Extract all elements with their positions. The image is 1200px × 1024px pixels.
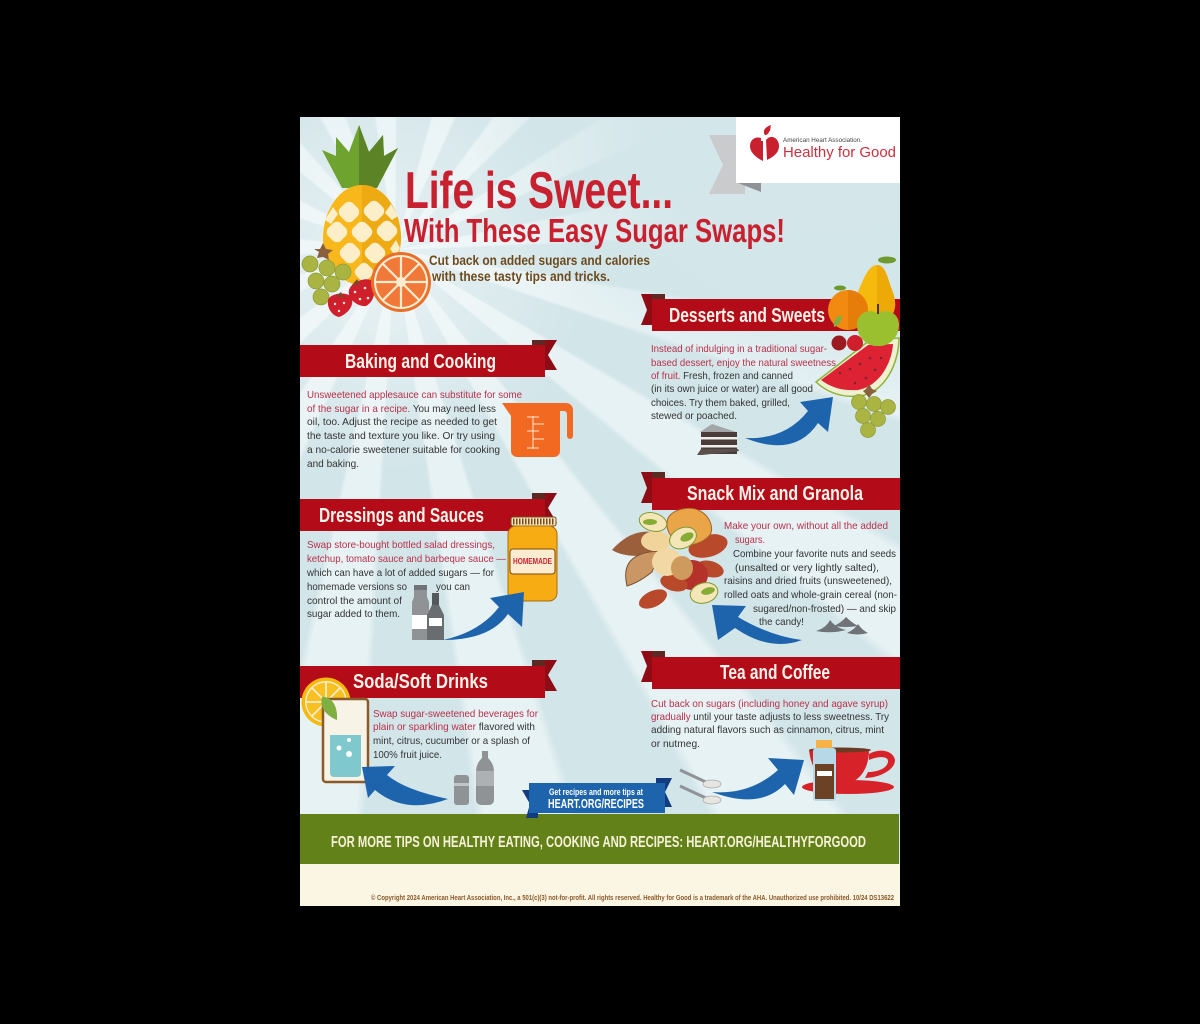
text: tea: Cut back on sugars (including honey and agave syrup) (651, 698, 888, 710)
icon: cake (697, 424, 739, 455)
text: snack: raisins and dried fruits (unsweetened), (724, 575, 892, 587)
green tips band (300, 814, 899, 864)
ribbon: tea: Tea and Coffee (720, 662, 830, 684)
text: baking: and baking. (307, 458, 359, 470)
ribbon: soda (300, 660, 557, 698)
text: tea: or nutmeg. (651, 738, 700, 750)
icon: spice bottle (813, 740, 836, 801)
title: With These Easy Sugar Swaps! (404, 212, 785, 249)
ribbon: dressings: Dressings and Sauces (319, 505, 484, 527)
text: baking: oil, too. Adjust the recipe as needed to get (307, 416, 497, 428)
icon: lemon slice (302, 678, 350, 726)
panel: tea and coffee (641, 651, 900, 804)
text: dressings: sugar added to them. (307, 608, 400, 620)
arrow: candy to nuts (712, 605, 802, 644)
ribbon: desserts: Desserts and Sweets (669, 305, 825, 327)
icon: spoons (680, 770, 721, 804)
subtitle: with these tasty tips and tricks. (431, 268, 610, 284)
text: snack: Combine your favorite nuts and seeds (733, 548, 896, 560)
arrow: bottles to jar (443, 592, 524, 640)
ribbon: baking (300, 340, 557, 377)
text: tea (651, 698, 890, 750)
copyright: © Copyright 2024 American Heart Association, Inc., a 501(c)(3) not-for-profit. All rights reserved. Healthy for Good is a trademark of the AHA. Unauthorized use prohibited. 10/24 DS13622 (371, 894, 894, 902)
text: desserts (651, 343, 836, 422)
text: snack: rolled oats and whole-grain cereal (non- (724, 589, 897, 601)
banner: recipes link: Get recipes and more tips at (549, 787, 644, 798)
ribbon: snack: Snack Mix and Granola (687, 483, 864, 505)
title (404, 162, 785, 249)
icon: chocolate chips (816, 617, 868, 634)
text: desserts: (in its own juice or water) are all good (651, 383, 813, 395)
panel: snack mix and granola (612, 472, 900, 644)
text: tea: adding natural flavors such as cinnamon, citrus, mint (651, 724, 884, 736)
logo panel: Healthy for Good (783, 144, 896, 161)
icon: orange slice (371, 252, 431, 312)
text: baking: of the sugar in a recipe. You may need less (307, 403, 496, 415)
subtitle (429, 252, 650, 284)
text: dressings: Swap store-bought bottled salad dressings, (307, 539, 495, 551)
text: desserts: choices. Try them baked, grilled, (651, 397, 790, 409)
icon: store bottles (412, 585, 444, 640)
text: desserts: Instead of indulging in a traditional sugar- (651, 343, 827, 355)
subtitle: Cut back on added sugars and calories (429, 252, 650, 268)
ribbon: soda: Soda/Soft Drinks (353, 671, 488, 693)
icon: glass of water (321, 697, 368, 782)
text: tea: gradually until your taste adjusts to less sweetness. Try (651, 711, 890, 723)
banner: recipes link: HEART.ORG/RECIPES (548, 797, 644, 811)
ribbon: snack (641, 472, 900, 510)
ribbon: baking: Baking and Cooking (345, 351, 496, 373)
icon: nuts (612, 508, 730, 613)
banner: recipes link (522, 778, 672, 818)
text: soda: plain or sparkling water flavored with (373, 721, 535, 733)
icon: jar homemade: HOMEMADE (513, 557, 553, 566)
panel: dressings and sauces (300, 493, 557, 640)
logo panel: American Heart Association. (783, 138, 862, 144)
text: dressings (306, 539, 506, 620)
arrow: cake to fruit (745, 397, 833, 445)
arrow: soda to water (362, 766, 448, 805)
text: snack: Make your own, without all the added (724, 520, 888, 532)
text: baking (307, 389, 522, 470)
ribbon: desserts (641, 294, 900, 331)
text: soda: Swap sugar-sweetened beverages for (373, 708, 538, 720)
footer cream band (300, 864, 900, 906)
text: baking: Unsweetened applesauce can substitute for some (307, 389, 522, 401)
logo panel (709, 117, 900, 194)
panel: baking and cooking (300, 340, 573, 470)
ribbon: dressings (300, 493, 557, 531)
text: snack: sugared/non-frosted) — and skip (753, 603, 896, 615)
icon: strawberries (328, 279, 375, 317)
green tips band: FOR MORE TIPS ON HEALTHY EATING, COOKING AND RECIPES: HEART.ORG/HEALTHYFORGOOD (331, 834, 866, 851)
icon: grapes (302, 243, 351, 305)
text: desserts: based dessert, enjoy the natural sweetness (651, 357, 836, 369)
ribbon: tea (641, 651, 900, 689)
icon: grapes right (852, 384, 896, 438)
text: snack: the candy! (759, 616, 804, 628)
icon: can and bottle (454, 751, 494, 805)
panel: desserts and sweets (641, 256, 900, 455)
text: soda: mint, citrus, cucumber or a splash of (373, 735, 530, 747)
text: baking: a no-calorie sweetener suitable for cooking (307, 444, 500, 456)
text: snack: (unsalted or very lightly salted), (735, 562, 879, 574)
icon: red cup and saucer (802, 748, 895, 794)
text: dressings: ketchup, tomato sauce and barbeque sauce — (307, 553, 506, 565)
text: dressings: you can (436, 581, 470, 593)
icon: jar homemade (508, 517, 557, 601)
text: soda: 100% fruit juice. (373, 749, 442, 761)
icon: pineapple (322, 125, 401, 285)
text: dressings: which can have a lot of added sugars — for (306, 567, 494, 579)
icon: measuring cup (502, 403, 573, 457)
text: snack (724, 520, 897, 628)
text: snack: sugars. (735, 534, 765, 546)
panel: soda and soft drinks (300, 660, 557, 805)
text: desserts: stewed or poached. (651, 410, 737, 422)
text: dressings: control the amount of (307, 595, 402, 607)
text: baking: the taste and texture you like. Or try using (307, 430, 495, 442)
text: dressings: homemade versions so (307, 581, 407, 593)
icon: fruit group (816, 256, 899, 396)
background sunburst (300, 117, 900, 906)
arrow: sugar to spices (712, 758, 804, 799)
text: soda (373, 708, 538, 761)
text: desserts: of fruit. Fresh, frozen and canned (651, 370, 793, 382)
title: Life is Sweet... (405, 162, 673, 220)
